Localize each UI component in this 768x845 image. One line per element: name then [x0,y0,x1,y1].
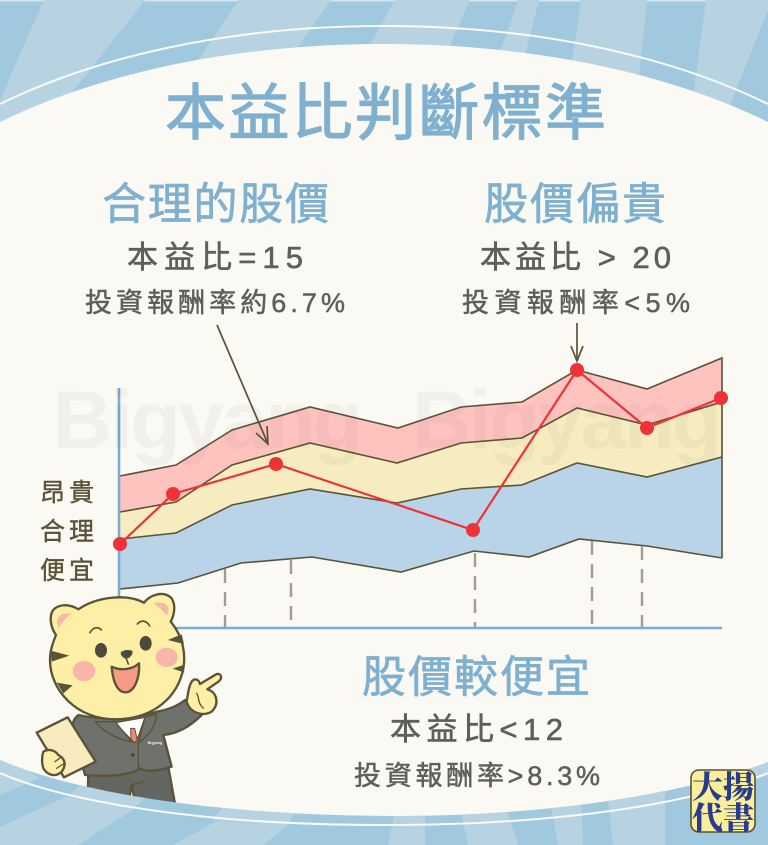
axis labels: 便宜 [40,557,94,585]
head [50,594,184,719]
axis labels: 合理 [40,518,94,546]
block: expensive price [462,180,690,318]
band: fair [120,402,722,539]
block: cheap price [354,653,600,791]
nose and mouth [121,650,133,659]
trousers [87,767,177,813]
tiger mascot in suit [37,594,221,813]
watermark: Bigyang [53,375,363,466]
pocket name: Bigyang [148,741,162,745]
title: 本益比判斷標準 [165,79,606,147]
band outlines [120,358,722,589]
logo stamp: 代 [692,793,724,838]
heading: fair price: 合理的股價 [102,180,329,229]
text: cheap return: 投資報酬率>8.3% [354,761,600,791]
text: fair PE: 本益比=15 [127,240,303,275]
block: fair price [85,180,345,318]
logo stamp: 大 [692,762,723,807]
light stripes [0,755,768,845]
brows [90,628,101,633]
chart: PE bands with red PE line [53,358,728,628]
arrow: to expensive price [571,323,583,361]
logo stamp: 書 [723,793,754,838]
eyes [95,643,107,658]
band: expensive [120,358,722,512]
pointing hand [187,674,221,714]
text: expensive return: 投資報酬率<5% [462,288,690,318]
shirt and tie [115,717,145,742]
bottom striped banner [0,755,768,845]
red PE line [120,370,721,544]
ears inner [57,613,72,628]
band: cheap [120,457,722,589]
heading: expensive price: 股價偏貴 [484,180,666,229]
watermark [53,375,722,466]
dashed guides [225,541,642,627]
axis labels: 昂貴 [40,479,94,507]
top striped banner [0,0,768,130]
text: fair return: 投資報酬率約6.7% [85,288,345,318]
watermark: Bigyang [412,375,722,466]
axes [119,388,722,628]
logo stamp [691,762,755,838]
lapels [95,722,132,742]
jacket and arm [73,700,202,776]
text: expensive PE: 本益比 > 20 [480,240,671,275]
red data points [113,363,728,551]
axis labels [40,479,94,585]
text: cheap PE: 本益比<12 [390,712,563,747]
heading: cheap price: 股價較便宜 [362,653,590,702]
logo stamp: 揚 [723,762,754,807]
cheeks [73,661,95,681]
holding hand [42,750,65,775]
clipboard [37,717,96,777]
stripes [51,634,184,693]
arrow: to fair price [217,325,268,444]
